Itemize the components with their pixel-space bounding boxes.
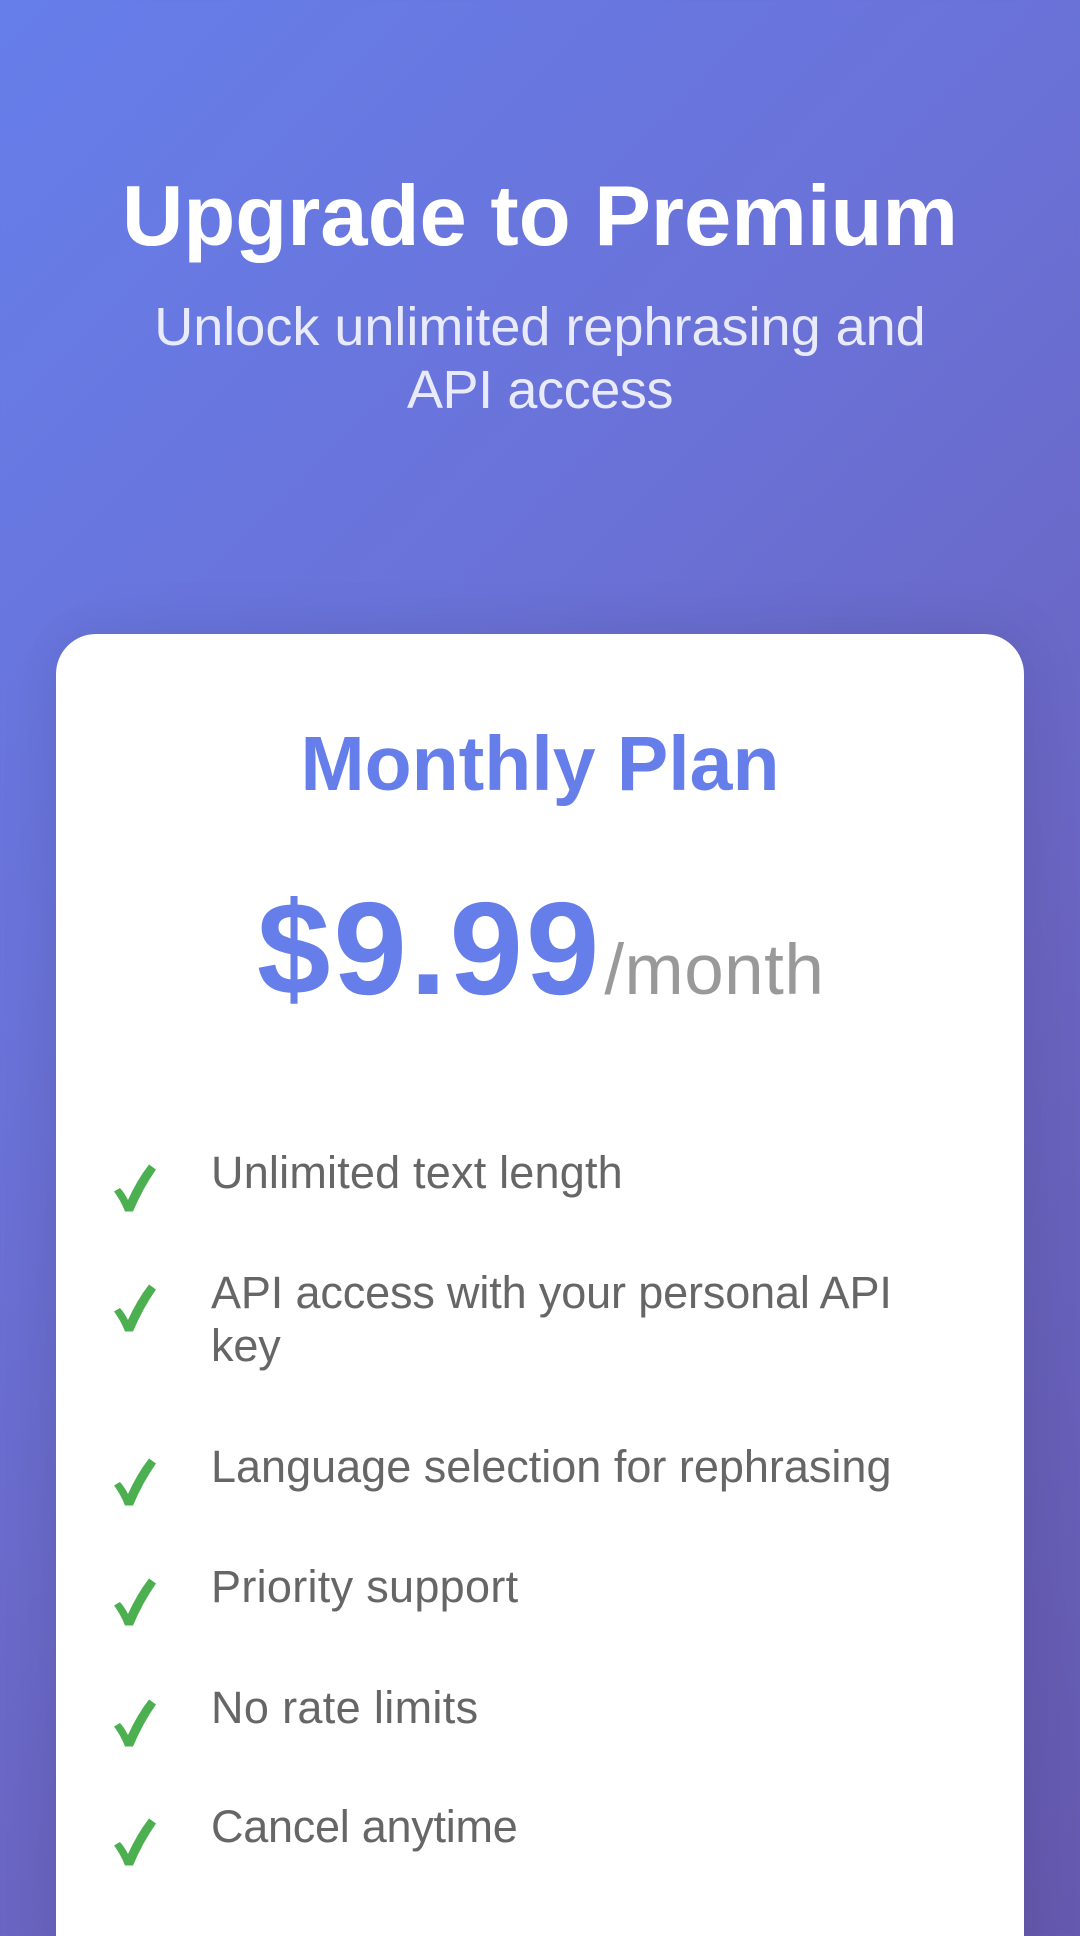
icon: check xyxy=(114,1164,156,1212)
subtitle: API access xyxy=(407,360,673,420)
subtitle xyxy=(154,297,926,420)
icon: check xyxy=(114,1284,156,1332)
subtitle: Unlock unlimited rephrasing and xyxy=(154,297,926,357)
icon: check xyxy=(114,1458,156,1506)
title: Upgrade to Premium xyxy=(122,169,958,264)
price: $9.99/month xyxy=(257,875,824,1022)
plan heading: Monthly Plan xyxy=(300,721,780,807)
panel: pricing card xyxy=(56,634,1024,1936)
feature: unlimited text length: Unlimited text length xyxy=(211,1147,623,1198)
feature: language selection: Language selection for rephrasing xyxy=(211,1441,891,1492)
icon: check xyxy=(114,1578,156,1626)
feature: cancel anytime: Cancel anytime xyxy=(211,1801,518,1852)
feature: API access: key xyxy=(211,1320,281,1371)
icon: check xyxy=(114,1700,156,1746)
feature: no rate limits: No rate limits xyxy=(211,1682,478,1733)
feature: API access xyxy=(211,1267,892,1371)
icon: check xyxy=(114,1818,156,1866)
feature: priority support: Priority support xyxy=(211,1561,518,1612)
feature: API access: API access with your personal API xyxy=(211,1267,892,1318)
